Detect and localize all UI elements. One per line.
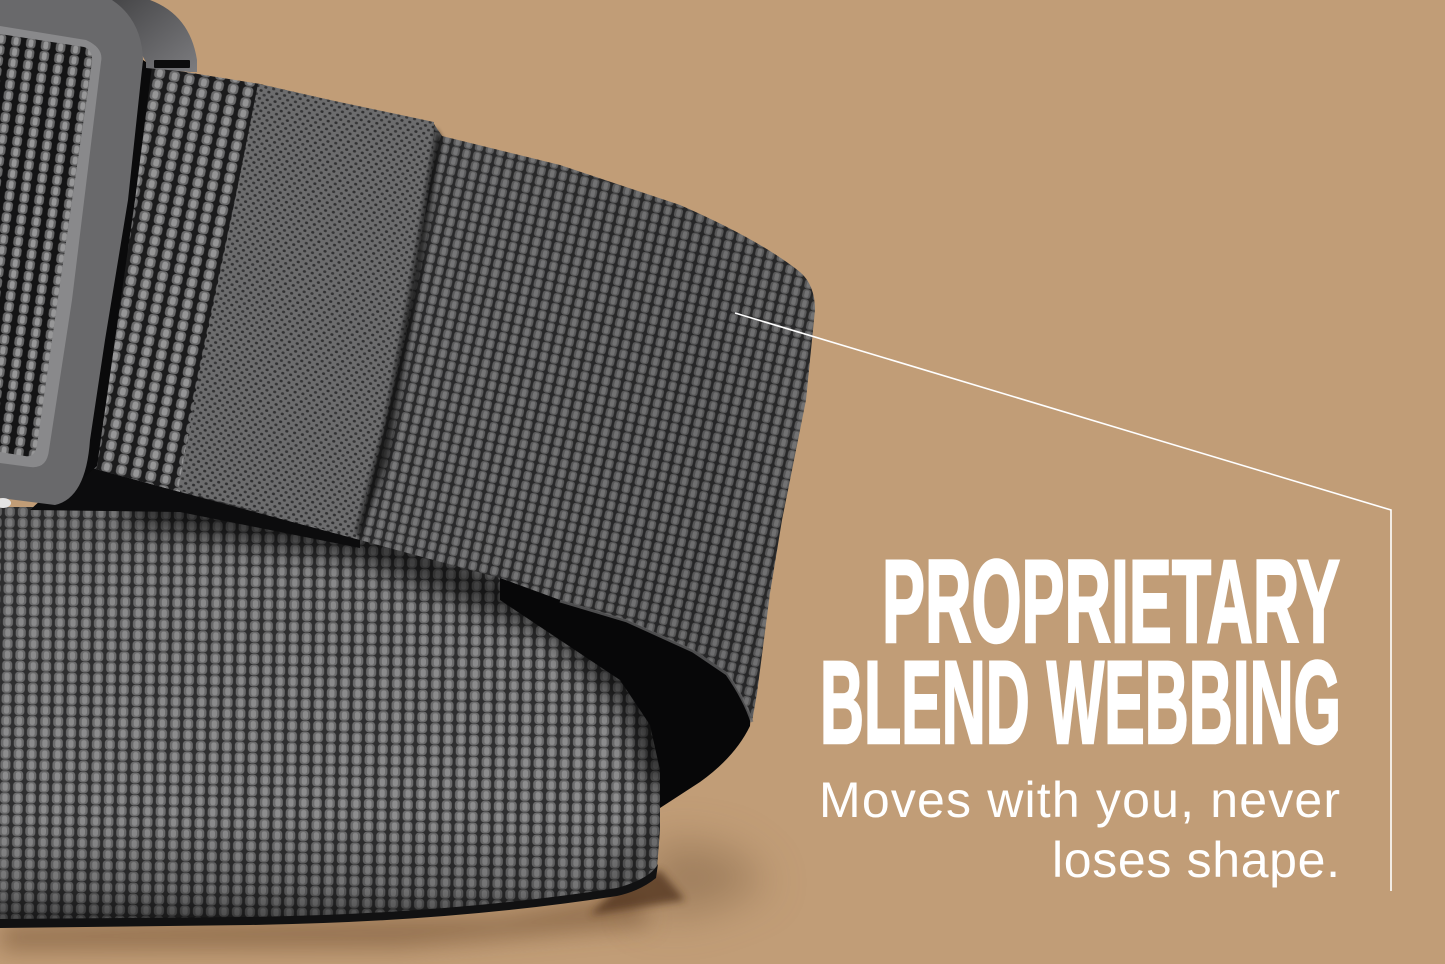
frame highlight bevel [0, 26, 101, 467]
subheading line 1: Moves with you, never [819, 772, 1340, 828]
subheading line 2: loses shape. [1052, 832, 1340, 888]
dark gap beside buckle [70, 60, 152, 490]
inner fold of the belt [500, 560, 753, 808]
belt illustration [0, 0, 815, 928]
cast shadow beside belt [640, 840, 770, 915]
soft rim of band edge [560, 601, 752, 722]
belt keeper loop [178, 84, 442, 538]
buckle [0, 0, 197, 508]
dark contact shadow [590, 870, 685, 915]
wing slot [154, 60, 190, 68]
keeper shadow [356, 128, 442, 538]
callout leader line [735, 313, 1391, 891]
dark pocket between bands [30, 455, 360, 548]
white speck [0, 498, 11, 508]
heading [820, 536, 1341, 769]
buckle frame [0, 0, 143, 505]
buckle webbing window [0, 34, 92, 456]
shadow cast by upper band [130, 505, 665, 780]
lower belt band [0, 505, 665, 928]
floor shadow under belt [0, 890, 650, 950]
upper belt band [92, 66, 815, 722]
subheading [819, 772, 1340, 888]
buckle side wing [110, 0, 197, 72]
bottom edge of lower band [0, 864, 658, 928]
